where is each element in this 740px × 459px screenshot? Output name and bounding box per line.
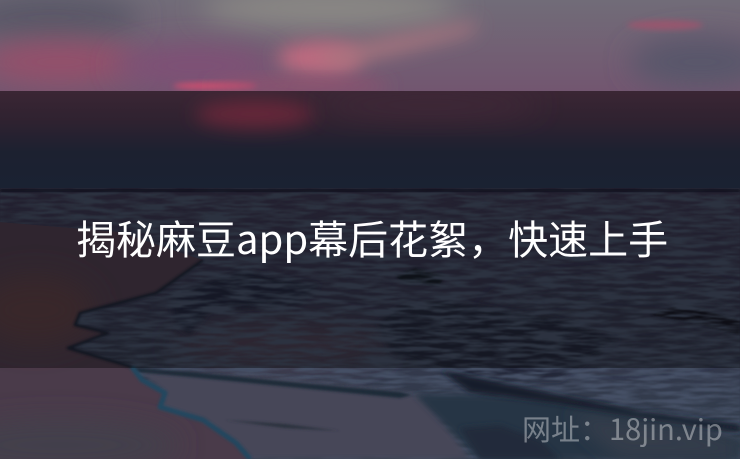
dark overlay band — [0, 91, 740, 368]
sea at horizon — [0, 91, 740, 191]
foam edge line — [68, 260, 250, 459]
watermark url: 网址：18jin.vip — [522, 407, 723, 449]
sky — [0, 0, 740, 92]
title: 揭秘麻豆app幕后花絮，快速上手 — [76, 208, 668, 266]
sand and shoreline — [0, 222, 250, 459]
horizon dark line — [0, 189, 740, 192]
water texture and waves — [0, 188, 740, 459]
